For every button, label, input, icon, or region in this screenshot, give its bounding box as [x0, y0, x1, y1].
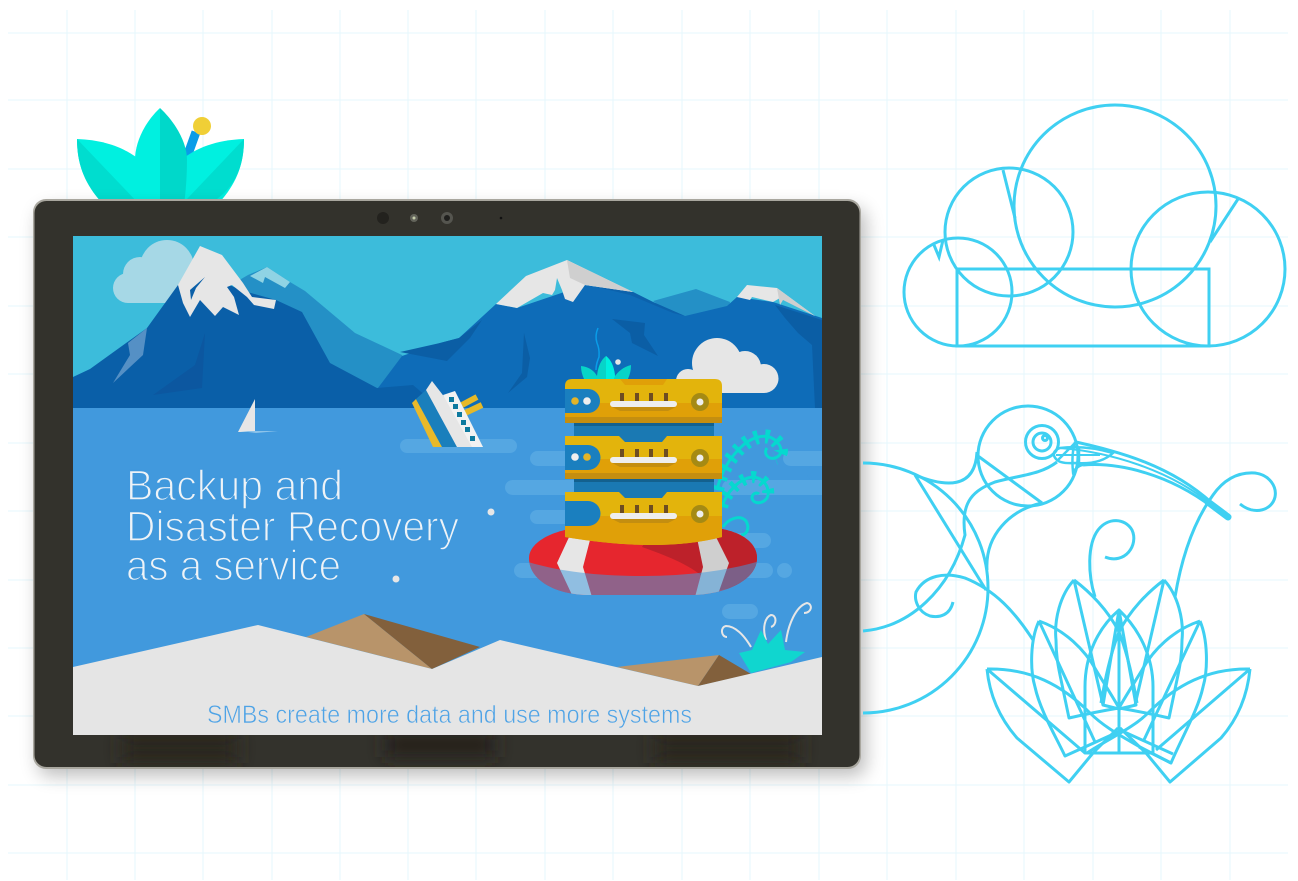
icon: shore plant with curls	[722, 603, 811, 673]
subheading: SMBs create more data and use more systems	[207, 701, 692, 729]
server unit 3	[565, 492, 722, 545]
line art: hummingbird	[863, 406, 1275, 713]
heading: Backup and	[126, 462, 343, 510]
lotus right petals	[1087, 580, 1250, 782]
icon: pale cloud	[113, 240, 198, 303]
tablet device	[33, 199, 866, 776]
screen illustration	[73, 236, 837, 735]
icon: front cameras	[377, 212, 502, 224]
line art: cloud	[904, 105, 1285, 346]
server stack	[565, 379, 722, 545]
left mountain	[73, 246, 440, 408]
right mountain	[378, 260, 822, 408]
icon: sinking ship	[412, 381, 483, 447]
heading: Disaster Recovery	[126, 503, 459, 551]
water	[73, 408, 822, 686]
water wave bars	[400, 439, 833, 619]
icon: teal lotus flower behind tablet	[77, 108, 244, 205]
lotus left petals	[987, 580, 1171, 782]
icon: sailboat	[238, 399, 278, 433]
back mountains	[236, 267, 730, 400]
server unit 1	[565, 379, 722, 423]
icon: small plant on server	[581, 328, 631, 381]
icon: life ring	[529, 529, 757, 595]
server unit 2	[565, 436, 722, 479]
small white dots	[392, 359, 621, 582]
icon: ferns	[717, 436, 781, 535]
brown hills	[306, 614, 751, 686]
snow foreground	[73, 625, 822, 735]
icon: white cloud	[676, 338, 778, 393]
line art: lotus	[987, 580, 1250, 782]
heading: as a service	[126, 542, 341, 590]
